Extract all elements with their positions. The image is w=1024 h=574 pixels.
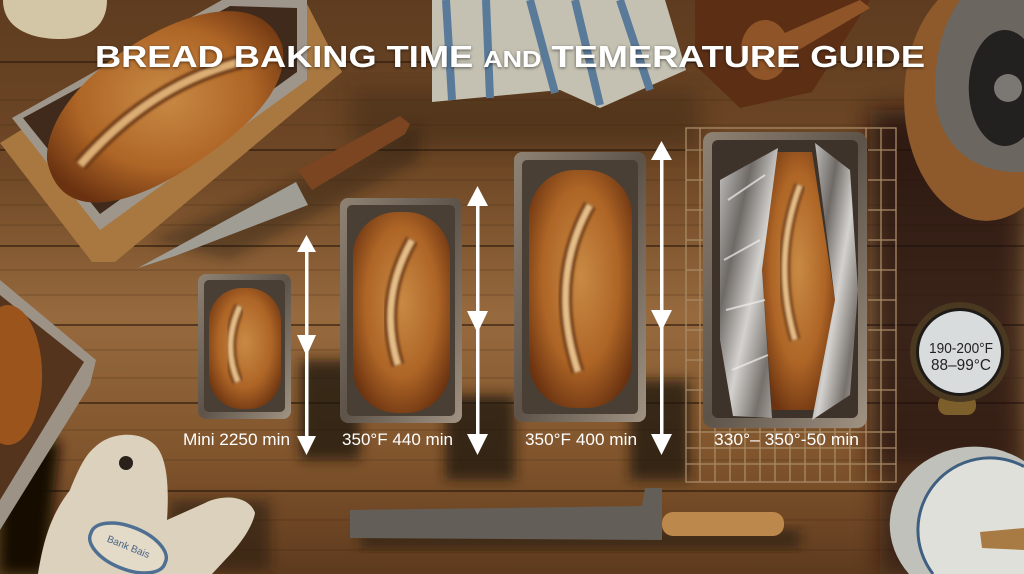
kitchen knife [138, 116, 410, 268]
oven mitt: Bank Bais [105, 534, 151, 561]
label: large loaf: 350°F 400 min [525, 430, 637, 449]
label: medium loaf: 350°F 440 min [342, 430, 453, 449]
thermometer dial: 190-200°F [929, 340, 993, 357]
thermometer dial: 88–99°C [931, 357, 991, 374]
loaf 1: mini pan [198, 274, 291, 419]
height arrow 3 [651, 141, 672, 455]
wooden tray with utensil [695, 0, 870, 108]
loaf 3: large pan [514, 152, 646, 422]
cutting board with loaf top left [0, 0, 342, 262]
stand mixer top right [904, 0, 1024, 221]
height arrow 1 [297, 235, 316, 455]
ceramic bowl bottom right [890, 447, 1024, 574]
height arrow 2 [467, 186, 488, 455]
bread knife [350, 488, 784, 540]
wire cooling rack [686, 128, 896, 482]
title: BREAD BAKING TIME AND TEMERATURE GUIDE [95, 39, 925, 74]
label: foil loaf: 330°– 350°-50 min [714, 430, 859, 449]
loaf 2: medium pan [340, 198, 462, 423]
striped tea towel [432, 0, 686, 108]
label: mini loaf: Mini 2250 min [183, 430, 290, 449]
jar top left corner [3, 0, 107, 39]
thermometer dial [910, 302, 1010, 415]
oven mitt [38, 435, 255, 574]
foil tray left [0, 280, 96, 530]
loaf 4: foil covered loaf in pan [703, 132, 867, 428]
